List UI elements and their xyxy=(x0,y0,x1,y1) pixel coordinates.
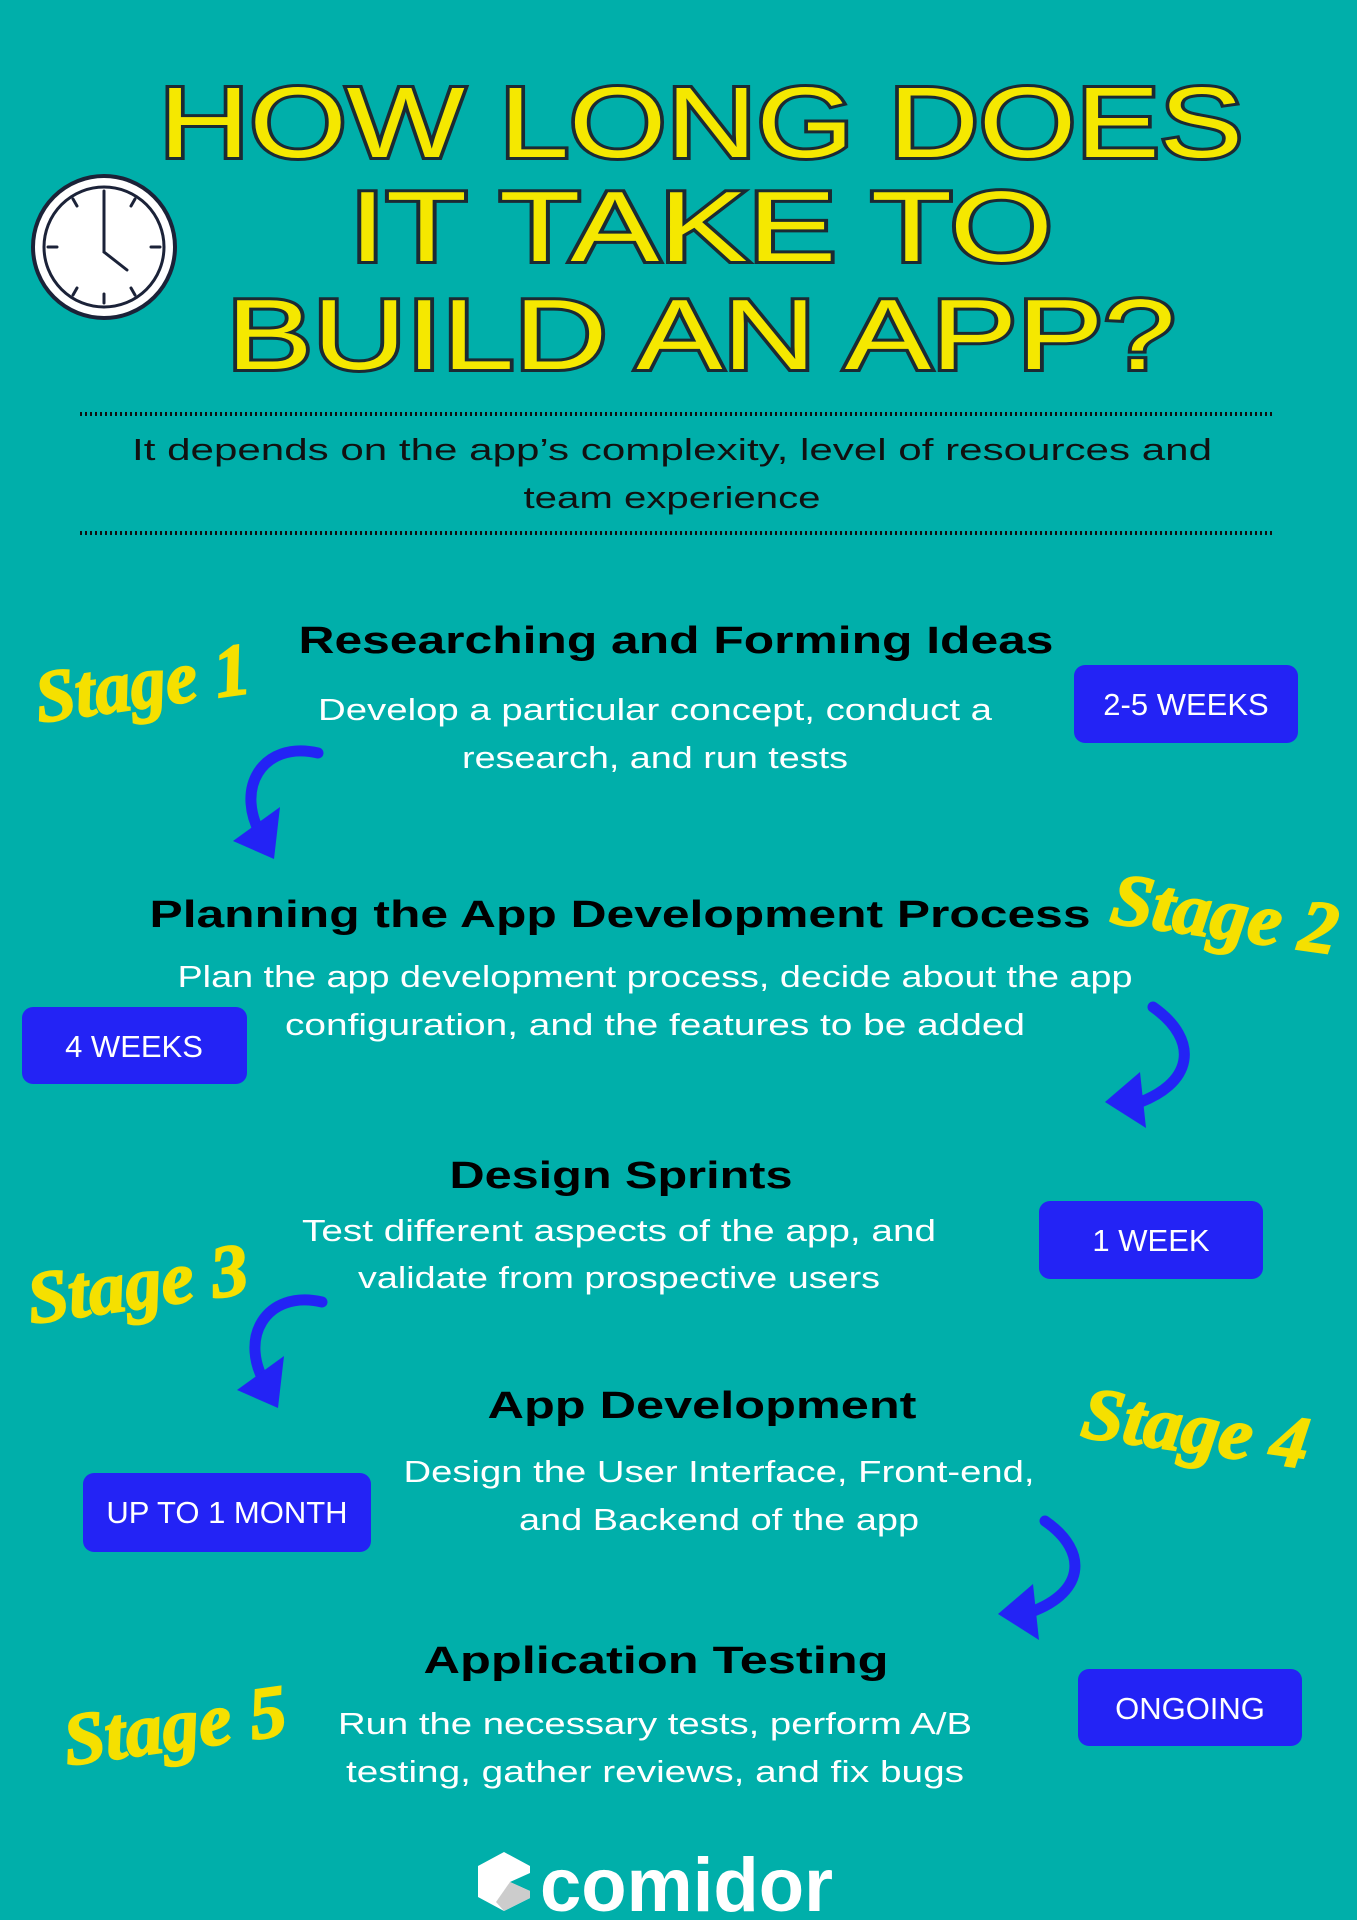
body: stage 2: Plan the app development process, decide about the app xyxy=(178,959,1132,994)
body: stage 1: research, and run tests xyxy=(462,740,848,775)
body: stage 3: Test different aspects of the app, and xyxy=(302,1213,936,1248)
badge: up to 1 month: UP TO 1 MONTH xyxy=(106,1495,348,1530)
body: stage 1 xyxy=(318,692,993,775)
badge: ongoing xyxy=(1078,1669,1302,1746)
body: stage 3 xyxy=(302,1213,936,1295)
stage 4 label: Stage 4 xyxy=(1077,1372,1314,1485)
stage 5 label: Stage 5 xyxy=(58,1670,291,1782)
badge: 1 week xyxy=(1039,1201,1263,1279)
body: stage 4: and Backend of the app xyxy=(519,1502,919,1537)
body: stage 4 xyxy=(404,1454,1034,1537)
arrow 2 xyxy=(1105,1007,1184,1128)
badge: up to 1 month xyxy=(83,1473,371,1552)
arrow 3 xyxy=(237,1300,322,1408)
body: stage 5: Run the necessary tests, perform A/B xyxy=(338,1706,972,1741)
stage 3 label: Stage 3 xyxy=(22,1228,253,1340)
icon: clock xyxy=(33,176,175,318)
title: BUILD AN APP? xyxy=(226,279,1176,391)
heading: stage 2: Planning the App Development Process xyxy=(150,894,1090,936)
subtitle: It depends on the app’s complexity, level of resources and xyxy=(132,432,1212,467)
heading: stage 3: Design Sprints xyxy=(450,1155,792,1197)
dotted divider top xyxy=(80,412,1274,416)
body: stage 2 xyxy=(178,959,1132,1042)
subtitle xyxy=(132,432,1212,515)
heading: stage 4: App Development xyxy=(488,1385,917,1427)
body: stage 5: testing, gather reviews, and fix bugs xyxy=(346,1754,964,1789)
heading: stage 5: Application Testing xyxy=(424,1640,888,1682)
badge: 4 weeks xyxy=(22,1007,247,1084)
badge: 4 weeks: 4 WEEKS xyxy=(65,1029,203,1064)
stage 1 label: Stage 1 xyxy=(30,628,255,739)
title: IT TAKE TO xyxy=(349,171,1053,283)
badge: 2-5 weeks: 2-5 WEEKS xyxy=(1103,687,1269,722)
subtitle: team experience xyxy=(524,480,820,515)
badge: 1 week: 1 WEEK xyxy=(1092,1223,1210,1258)
body: stage 3: validate from prospective users xyxy=(358,1260,880,1295)
badge: 2-5 weeks xyxy=(1074,665,1298,743)
badge: ongoing: ONGOING xyxy=(1115,1691,1265,1726)
body: stage 1: Develop a particular concept, conduct a xyxy=(318,692,993,727)
body: stage 5 xyxy=(338,1706,972,1789)
title: HOW LONG DOES xyxy=(159,67,1243,179)
stage 2 label: Stage 2 xyxy=(1106,858,1343,971)
body: stage 4: Design the User Interface, Front-end, xyxy=(404,1454,1034,1489)
arrow 1 xyxy=(233,751,318,859)
arrow 4 xyxy=(998,1521,1075,1640)
heading: stage 1: Researching and Forming Ideas xyxy=(298,620,1054,662)
body: stage 2: configuration, and the features to be added xyxy=(285,1007,1025,1042)
title xyxy=(159,67,1243,391)
